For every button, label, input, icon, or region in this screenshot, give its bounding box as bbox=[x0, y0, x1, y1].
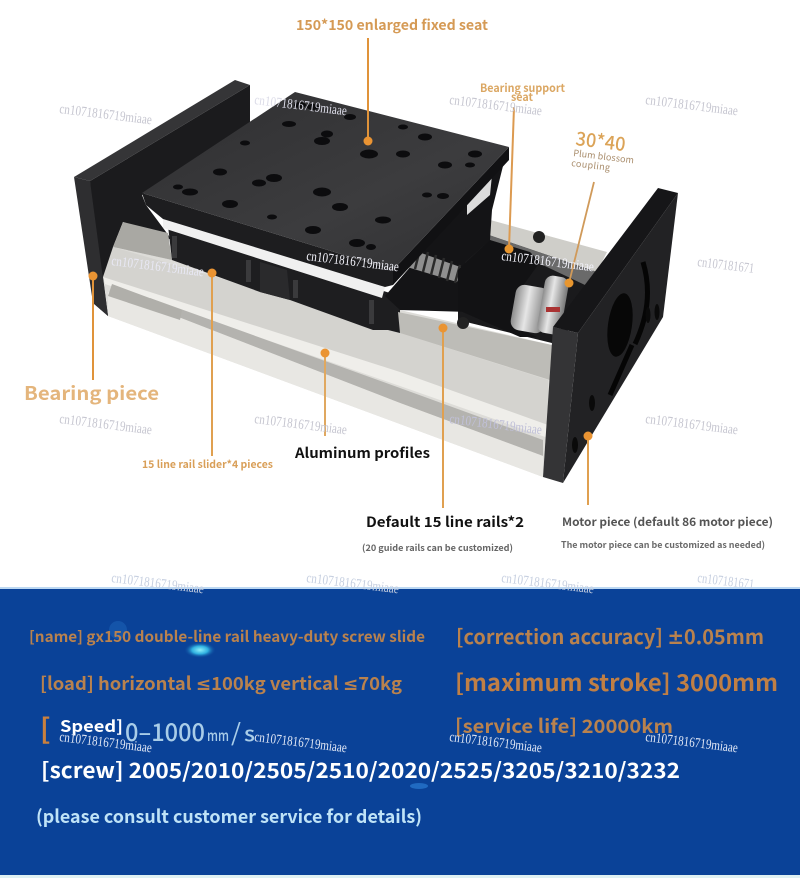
callout: 30*40 plum blossom coupling bbox=[564, 124, 635, 288]
callout: default 15 line rails: Default 15 line rails*2 bbox=[366, 512, 524, 532]
watermarks: cn107181671 bbox=[697, 571, 755, 593]
callout: default 15 line rails bbox=[362, 324, 524, 554]
top mounting plate bbox=[142, 92, 509, 287]
callout: motor piece bbox=[561, 432, 773, 551]
callout: motor piece: Motor piece (default 86 motor piece) bbox=[562, 514, 773, 530]
left end plate bbox=[74, 80, 250, 316]
callout: 15 line rail slider: 15 line rail slider*4 pieces bbox=[142, 457, 273, 472]
callout: aluminum profiles: Aluminum profiles bbox=[294, 443, 430, 463]
white spacer layer bbox=[163, 219, 385, 298]
callout: motor piece: The motor piece can be customized as needed) bbox=[561, 538, 765, 551]
watermarks: cn1071816719miaae bbox=[111, 571, 205, 597]
shadow block behind right of plate bbox=[385, 158, 505, 312]
product photo: linear slide bbox=[74, 80, 678, 483]
watermarks: cn1071816719miaae bbox=[501, 249, 595, 275]
plum blossom coupling bbox=[509, 274, 570, 336]
front rail mounting hole bbox=[457, 317, 469, 329]
spec: service life: [service life] 20000km bbox=[455, 712, 673, 739]
callout: bearing piece: Bearing piece bbox=[24, 379, 159, 406]
front guide rail bbox=[398, 312, 552, 380]
spec: speed: [ bbox=[40, 708, 51, 748]
right end plate (motor piece) bbox=[543, 188, 678, 483]
callout: 30*40 plum blossom coupling: Plum blossom bbox=[573, 146, 635, 166]
panel: specifications bbox=[0, 587, 800, 878]
watermarks bbox=[59, 93, 755, 756]
callout: default 15 line rails: (20 guide rails can be customized) bbox=[362, 541, 513, 554]
spec: speed: Speed] bbox=[60, 713, 123, 737]
mounting holes bbox=[173, 102, 482, 250]
rear guide rail bbox=[458, 218, 607, 345]
watermarks: cn1071816719miaae bbox=[306, 249, 400, 275]
watermarks: cn1071816719miaae bbox=[254, 93, 348, 119]
spec: load: [load] horizontal ≤100kg vertical ≤70kg bbox=[40, 670, 402, 696]
spec: speed: mm bbox=[207, 725, 229, 746]
watermarks: cn1071816719miaae bbox=[645, 412, 739, 438]
spec: speed bbox=[40, 708, 255, 748]
spec: speed: / bbox=[231, 713, 242, 748]
spec: customer service note: (please consult customer service for details) bbox=[36, 803, 422, 829]
callout: bearing support seat: Bearing support bbox=[480, 80, 565, 96]
bearing support seat block bbox=[458, 240, 540, 337]
spec: correction accuracy: [correction accuracy] ±0.05mm bbox=[456, 621, 764, 650]
ball screw bbox=[407, 249, 463, 283]
glow accents bbox=[109, 621, 428, 789]
callout: bearing support seat bbox=[480, 80, 565, 254]
spec: screw: [screw] 2005/2010/2505/2510/2020/2525/3205/3210/3232 bbox=[41, 755, 680, 785]
callout: 150*150 enlarged fixed seat: 150*150 enlarged fixed seat bbox=[296, 15, 488, 35]
callout: 15 line rail slider bbox=[142, 268, 273, 472]
watermarks: cn1071816719miaae bbox=[254, 412, 348, 438]
watermarks: cn1071816719miaae bbox=[449, 93, 543, 119]
watermarks: cn1071816719miaae bbox=[254, 730, 348, 756]
spec: speed: 0–1000 bbox=[125, 713, 205, 748]
callout: 30*40 plum blossom coupling: 30*40 bbox=[574, 124, 627, 157]
callout: bearing support seat: seat bbox=[511, 89, 533, 105]
callout: aluminum profiles bbox=[294, 348, 430, 463]
callout: 30*40 plum blossom coupling: coupling bbox=[571, 156, 611, 174]
rail strip bbox=[113, 222, 172, 260]
watermarks: cn1071816719miaae bbox=[59, 412, 153, 438]
spec: name: [name] gx150 double-line rail heavy-duty screw slide bbox=[29, 626, 425, 647]
watermarks: cn1071816719miaae bbox=[449, 730, 543, 756]
watermarks: cn1071816719miaae bbox=[111, 254, 205, 280]
watermarks: cn1071816719miaae bbox=[449, 412, 543, 438]
spec: speed: s bbox=[244, 718, 255, 747]
watermarks: cn1071816719miaae bbox=[645, 730, 739, 756]
callout: 150*150 enlarged fixed seat bbox=[296, 15, 488, 146]
callout: bearing piece bbox=[24, 272, 159, 406]
spec: maximum stroke: [maximum stroke] 3000mm bbox=[455, 664, 778, 698]
watermarks: cn1071816719miaae bbox=[645, 93, 739, 119]
watermarks: cn1071816719miaae bbox=[306, 571, 400, 597]
watermarks: cn1071816719miaae bbox=[501, 571, 595, 597]
watermarks: cn1071816719miaae bbox=[59, 730, 153, 756]
aluminum profile body bbox=[100, 247, 552, 477]
watermarks: cn1071816719miaae bbox=[59, 102, 153, 128]
watermarks: cn107181671 bbox=[697, 255, 755, 277]
slider blocks bbox=[168, 226, 400, 333]
